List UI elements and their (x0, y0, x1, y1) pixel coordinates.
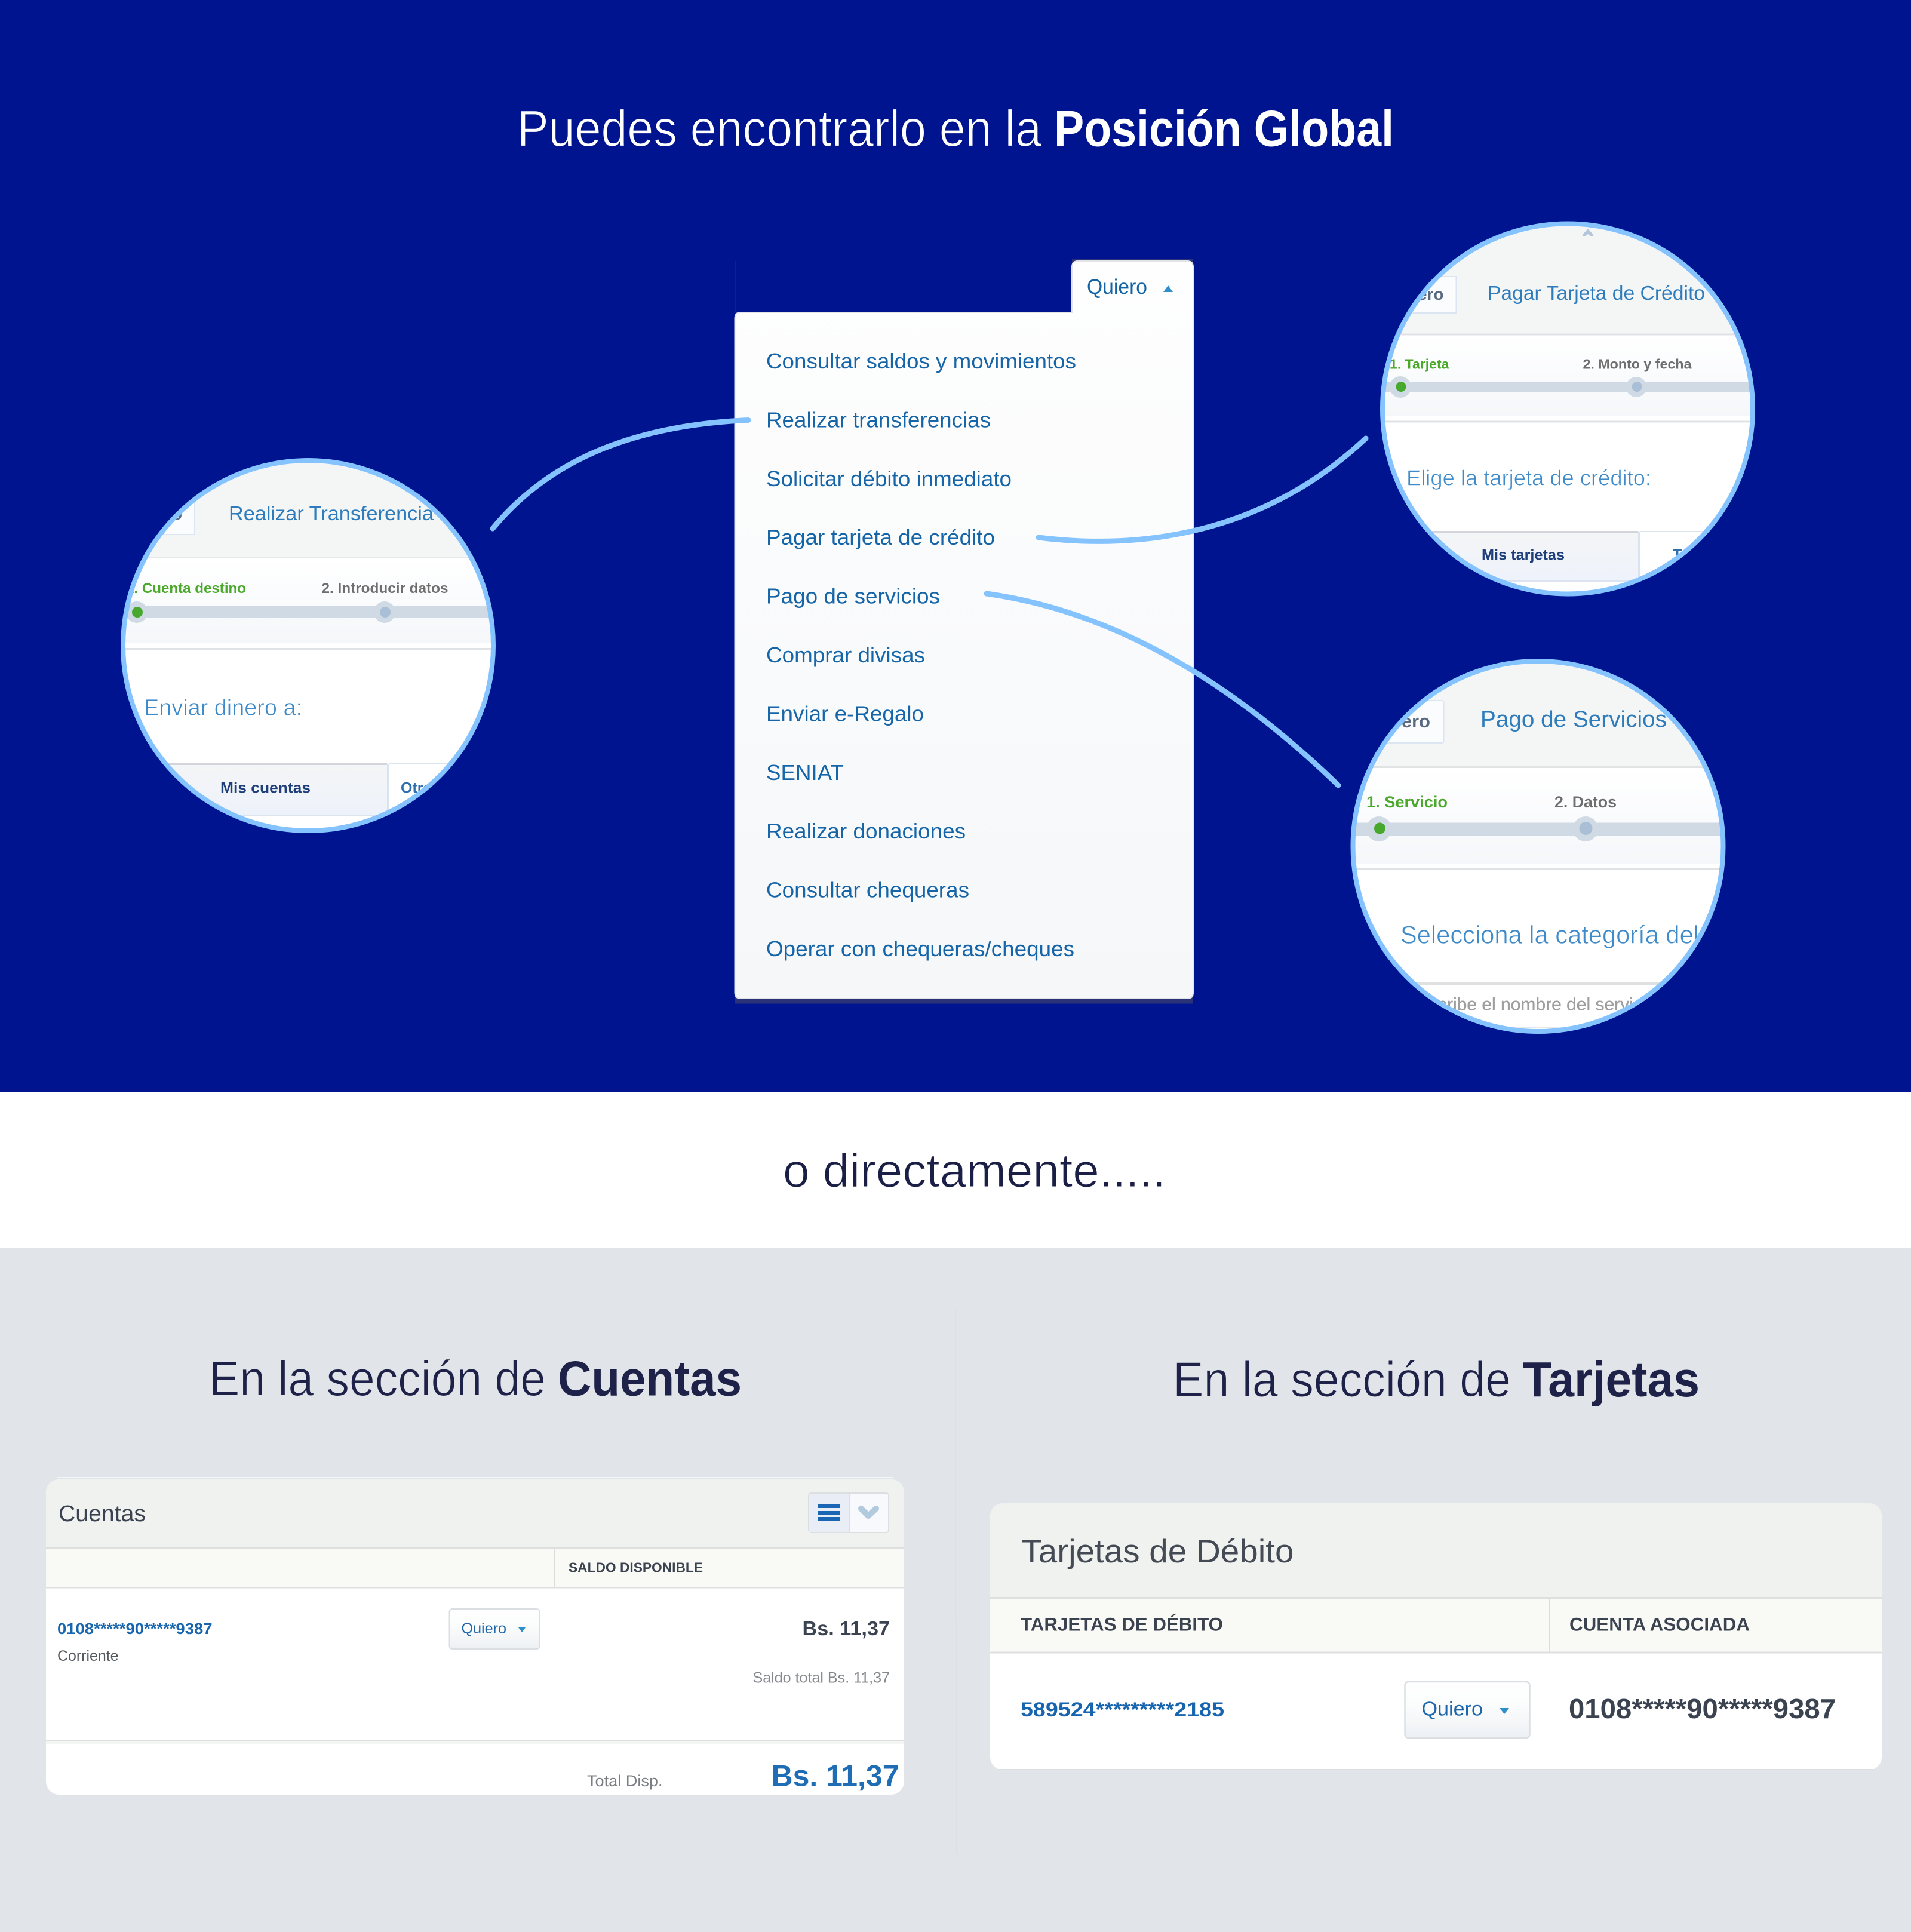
column headers (1021, 1614, 1750, 1635)
card number: 589524*********2185 (1021, 1698, 1224, 1721)
panel: circle Pagar Tarjeta de Crédito: Elige la tarjeta de crédito: (1406, 466, 1651, 490)
tabs: Mis cuentas (220, 780, 311, 797)
tabs: Mis tarjetas (1482, 547, 1565, 564)
panel: circle Pago de Servicios (1350, 657, 1726, 1031)
Quiero button (1405, 1682, 1530, 1738)
heading: o directamente: o directamente..... (783, 1144, 1166, 1197)
tabs: Terceros (1673, 547, 1735, 564)
heading: sección Tarjetas (1173, 1352, 1700, 1407)
menu items: Enviar e-Regalo (766, 701, 924, 726)
Quiero button (449, 1609, 540, 1649)
panel: circle Realizar Transferencia: Quiero (128, 505, 182, 523)
menu items: Comprar divisas (766, 643, 925, 667)
panel: grey section (0, 1248, 1911, 1932)
search input: Escribe el nombre del servicio (1417, 995, 1656, 1014)
column headers: CUENTA ASOCIADA (1569, 1614, 1750, 1635)
panel: circle Realizar Transferencia (119, 454, 503, 831)
account number: 0108*****90*****9387 (57, 1620, 213, 1638)
menu items: Consultar saldos y movimientos (766, 349, 1076, 373)
heading: sección Tarjetas: Tarjetas (1523, 1352, 1700, 1407)
panel title: Tarjetas de Débito (1021, 1532, 1294, 1569)
menu items: SENIAT (766, 760, 844, 785)
search input (1417, 982, 1660, 1028)
progress steps: 2. Monto y fecha (1583, 356, 1692, 371)
tabs (1432, 531, 1703, 582)
linked account: 0108*****90*****9387 (1569, 1693, 1836, 1724)
arrow: transferencias to circle (493, 420, 748, 529)
title (517, 101, 1394, 158)
panel title: Cuentas (59, 1501, 146, 1526)
tabs (168, 763, 448, 816)
balance: Bs. 11,37 (803, 1617, 890, 1639)
arrow: servicios to circle (987, 594, 1338, 785)
progress steps: 1. Tarjeta (1390, 356, 1449, 371)
heading: sección Cuentas (209, 1351, 742, 1406)
panel: blue section (0, 0, 1911, 1092)
menu items: Solicitar débito inmediato (766, 466, 1012, 491)
title: Posición Global (1054, 101, 1394, 158)
account type: Corriente (57, 1648, 118, 1664)
heading: Pago de Servicios (1480, 707, 1667, 732)
arrow: tarjeta de crédito to circle (1039, 438, 1366, 541)
Quiero button: Quiero (1421, 1697, 1483, 1720)
panel: Quiero dropdown menu (735, 259, 1193, 1003)
heading: sección Cuentas: Cuentas (558, 1351, 742, 1406)
tabs: Otras (401, 780, 440, 797)
Quiero button: Quiero (461, 1620, 506, 1637)
menu items (766, 349, 1076, 961)
panel: circle Pago de Servicios: Selecciona la categoría del (1400, 921, 1699, 948)
progress steps: 1. Servicio (1366, 793, 1448, 811)
panel: Tarjetas de Débito table (990, 1503, 1882, 1770)
heading: sección Cuentas: En la sección de (209, 1351, 546, 1406)
menu items: Operar con chequeras/cheques (766, 936, 1074, 961)
progress steps: 1. Cuenta destino (126, 580, 246, 597)
heading: Pagar Tarjeta de Crédito (1488, 282, 1705, 304)
panel: Cuentas table (46, 1477, 904, 1795)
progress steps: 2. Datos (1554, 793, 1617, 811)
Quiero button label: Quiero (1087, 275, 1147, 299)
menu items: Realizar donaciones (766, 819, 966, 843)
panel: circle Pagar Tarjeta de Crédito: Quiero (1390, 285, 1444, 303)
menu items: Pago de servicios (766, 584, 940, 609)
footer total label: Total Disp. (587, 1772, 663, 1790)
column headers: TARJETAS DE DÉBITO (1021, 1614, 1223, 1635)
panel: circle Pagar Tarjeta de Crédito (1380, 221, 1756, 594)
view toggle buttons (809, 1493, 889, 1532)
progress steps: 2. Introducir datos (321, 580, 448, 597)
menu items: Consultar chequeras (766, 878, 969, 902)
menu items: Pagar tarjeta de crédito (766, 525, 995, 549)
total balance: Saldo total Bs. 11,37 (752, 1670, 890, 1687)
panel: circle Realizar Transferencia: Enviar dinero a: (144, 695, 302, 720)
heading: sección Tarjetas: En la sección de (1173, 1352, 1511, 1407)
panel: circle Pago de Servicios: Quiero (1371, 711, 1430, 732)
icon: list (818, 1504, 840, 1521)
title: Puedes encontrarlo en la (517, 101, 1042, 158)
progress steps (128, 583, 488, 623)
progress steps (1350, 793, 1726, 841)
menu items: Realizar transferencias (766, 407, 991, 432)
icon: chevron (861, 1509, 876, 1516)
footer total value: Bs. 11,37 (772, 1759, 899, 1793)
progress steps (1380, 356, 1756, 398)
column header: SALDO DISPONIBLE (569, 1560, 703, 1575)
heading: Realizar Transferencia (229, 502, 434, 524)
